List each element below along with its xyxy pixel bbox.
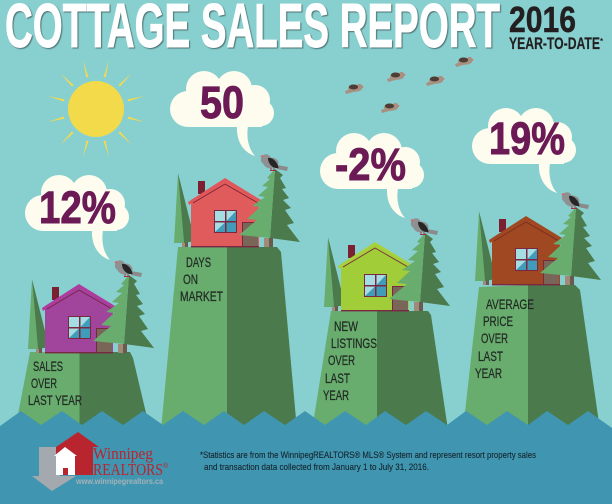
label: average price over last year: PRICE bbox=[483, 313, 513, 329]
label: new listings over last year: NEW bbox=[334, 318, 359, 334]
year heading: 2016 bbox=[509, 0, 576, 40]
label: sales over last year: OVER bbox=[31, 375, 57, 391]
panel: average price over last year bbox=[463, 108, 601, 430]
speech cloud: 12% bbox=[25, 175, 129, 260]
label: sales over last year bbox=[28, 358, 82, 408]
label: days on market bbox=[180, 254, 223, 304]
label: average price over last year: OVER bbox=[481, 330, 508, 346]
label: new listings over last year: LAST bbox=[325, 370, 350, 386]
label: new listings over last year bbox=[323, 318, 377, 403]
mountain 3 bbox=[312, 311, 448, 430]
speech cloud: 50 bbox=[170, 71, 274, 156]
panel: sales over last year bbox=[15, 175, 154, 430]
label: new listings over last year: YEAR bbox=[323, 387, 349, 403]
label: average price over last year: AVERAGE bbox=[486, 296, 534, 312]
speech cloud: 12%: 12% bbox=[39, 182, 116, 233]
logo: Winnipeg Realtors bbox=[32, 432, 169, 491]
logo url: www.winnipegrealtors.ca bbox=[75, 476, 163, 486]
logo wordmark: ® bbox=[163, 462, 169, 470]
mountain 1 bbox=[15, 352, 150, 430]
logo red house bbox=[56, 432, 99, 475]
cottage 3 bbox=[324, 218, 450, 311]
label: new listings over last year: OVER bbox=[328, 352, 355, 368]
label: average price over last year: YEAR bbox=[475, 365, 502, 381]
label: average price over last year bbox=[475, 296, 534, 381]
speech cloud: -2%: -2% bbox=[335, 139, 406, 190]
footnote: *Statistics are from the WinnipegREALTORS® MLS® System and represent resort property sales bbox=[200, 450, 536, 461]
logo wordmark: REALTORS bbox=[93, 460, 163, 479]
logo wordmark bbox=[93, 444, 169, 479]
cottage 2 bbox=[174, 154, 300, 247]
logo arrow bbox=[32, 447, 76, 491]
panel: new listings over last year bbox=[312, 133, 450, 430]
footnote: and transaction data collected from January 1 to July 31, 2016. bbox=[204, 462, 429, 473]
label: average price over last year: LAST bbox=[478, 348, 503, 364]
label: days on market: DAYS bbox=[186, 254, 211, 270]
logo white house bbox=[54, 447, 77, 475]
cottage 4 bbox=[475, 192, 601, 285]
icon: flock of birds bbox=[345, 57, 474, 113]
label: new listings over last year: LISTINGS bbox=[331, 335, 377, 351]
panel: days on market bbox=[161, 71, 300, 430]
mountain 2 bbox=[161, 247, 297, 430]
year heading bbox=[509, 0, 604, 53]
speech cloud: 50: 50 bbox=[200, 77, 244, 128]
label: sales over last year: LAST YEAR bbox=[28, 392, 82, 408]
cottage 1 bbox=[28, 260, 154, 353]
water bbox=[0, 411, 612, 504]
mountain 4 bbox=[463, 285, 600, 430]
icon: sun bbox=[47, 60, 145, 158]
logo door bbox=[63, 468, 68, 475]
speech cloud: 19% bbox=[472, 108, 576, 193]
label: days on market: ON bbox=[183, 271, 198, 287]
speech cloud: -2% bbox=[320, 133, 424, 218]
label: sales over last year: SALES bbox=[33, 358, 63, 374]
year heading: * bbox=[600, 37, 604, 46]
speech cloud: 19%: 19% bbox=[489, 113, 565, 164]
label: days on market: MARKET bbox=[180, 288, 223, 304]
logo wordmark: Winnipeg bbox=[93, 444, 153, 463]
footnote bbox=[200, 450, 536, 473]
